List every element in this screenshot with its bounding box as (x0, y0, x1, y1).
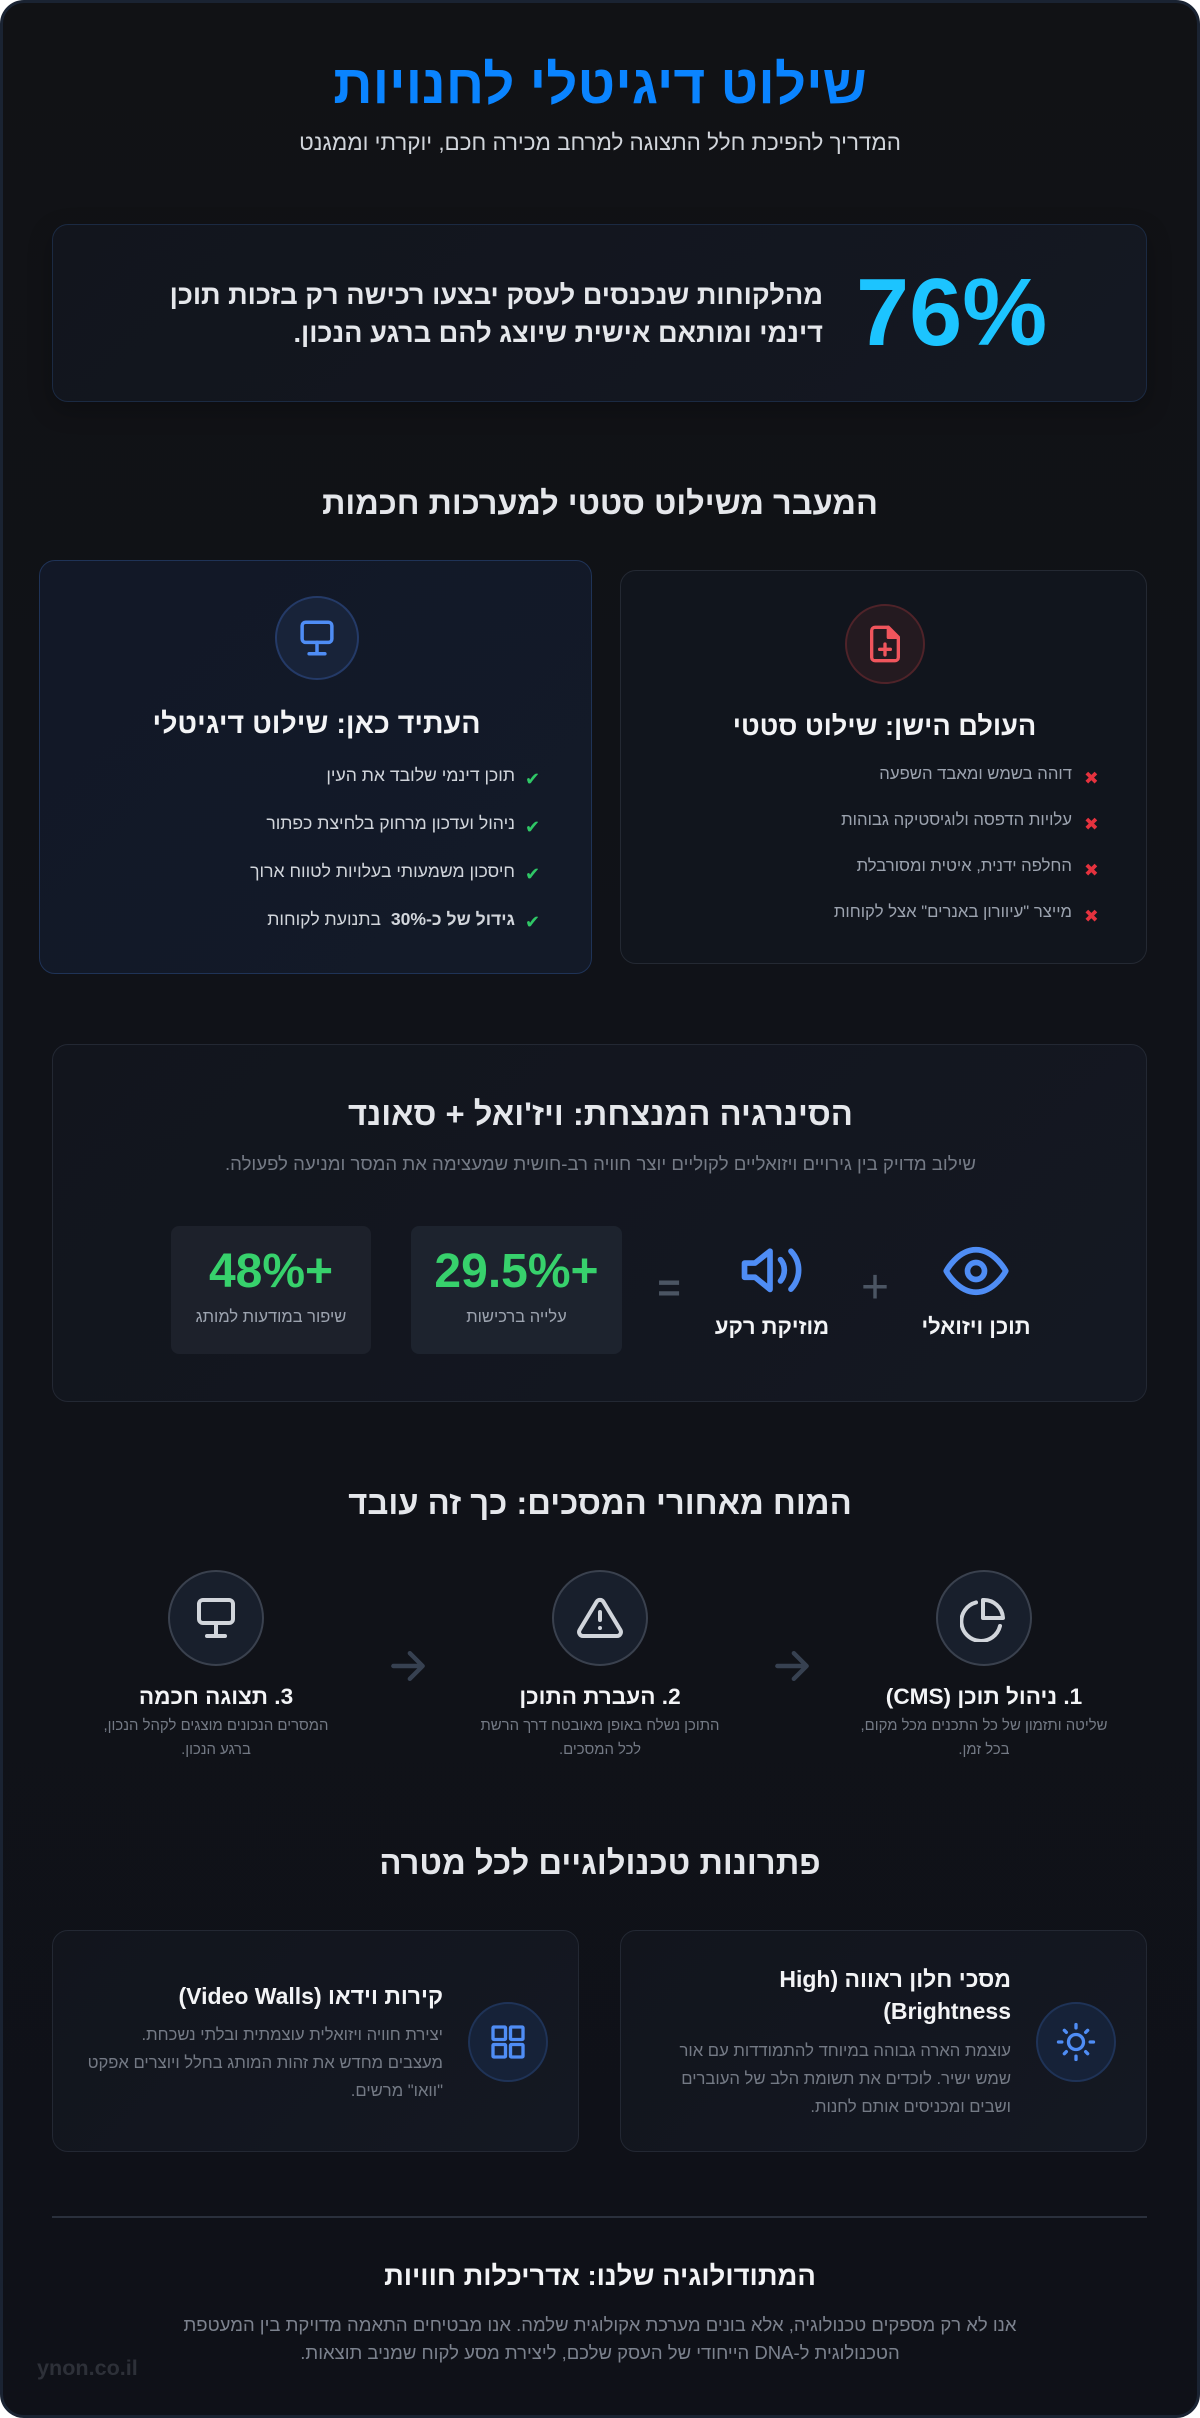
step description: שליטה ותזמון של כל התכנים מכל מקום, (860, 1718, 1108, 1734)
card description: מעצבים מחדש את זהות המותג בחלל ויוצרים אפקט (88, 2053, 443, 2072)
step title: 2. העברת התוכן (519, 1684, 681, 1709)
list: benefits: תוכן דינמי שלובד את העין (326, 765, 515, 785)
stat box: brand awareness: +48% (209, 1245, 333, 1298)
step 2: content delivery (480, 1570, 719, 1758)
arrow: step 1 to 2 (775, 1651, 809, 1681)
heading: methodology: המתודולוגיה שלנו: אדריכלות חוויות (384, 2260, 816, 2291)
icon: monitor (275, 596, 359, 680)
card description: יצירת חוויה ויזואלית עוצמתית ובלתי נשכחת. (142, 2025, 443, 2044)
stat box: brand awareness: שיפור במודעות למותג (196, 1308, 346, 1326)
plus sign: + (861, 1261, 889, 1314)
panel: synergy (52, 1044, 1147, 1402)
list: benefits: ✔ (525, 769, 540, 790)
list: benefits (250, 765, 540, 933)
step description: לכל המסכים. (559, 1742, 641, 1758)
list: drawbacks: ✖ (1084, 769, 1099, 789)
icon: document (845, 604, 925, 684)
icon: pie chart (936, 1570, 1032, 1666)
list: drawbacks: ✖ (1084, 861, 1099, 881)
stat box: sales lift: +29.5% (434, 1245, 599, 1298)
list: drawbacks: מייצר "עיוורון באנרים" אצל לקוחות (834, 902, 1072, 921)
step title: 1. ניהול תוכן (CMS) (886, 1684, 1082, 1709)
list: benefits: גידול של כ-30% בתנועת לקוחות (267, 909, 515, 929)
step 1: content management (860, 1570, 1108, 1758)
panel description: שילוב מדויק בין גירויים ויזואליים לקוליים יוצר חוויה רב-חושית שמעצימה את המסר ומניעה לפעולה. (225, 1153, 976, 1174)
heading: how it works: המוח מאחורי המסכים: כך זה עובד (348, 1484, 852, 1521)
arrow: step 2 to 3 (391, 1651, 425, 1681)
panel heading: הסינרגיה המנצחת: ויז'ואל + סאונד (348, 1095, 853, 1132)
card description: שמש ישיר. לוכדים את תשומת הלב של העוברים (681, 2069, 1011, 2088)
list: benefits: חיסכון משמעותי בעלויות לטווח ארוך (250, 861, 515, 881)
statistic text: דינמי ומותאם אישית שיוצג להם ברגע הנכון. (293, 317, 823, 348)
panel: window displays (620, 1930, 1147, 2152)
statistic text: מהלקוחות שנכנסים לעסק יבצעו רכישה רק בזכות תוכן (170, 279, 823, 310)
card description: עוצמת הארה גבוהה במיוחד להתמודדות עם אור (680, 2041, 1011, 2060)
card title: Brightness) (883, 1998, 1011, 2024)
step description (480, 1718, 719, 1758)
list: benefits: ניהול ועדכון מרחוק בלחיצת כפתור (266, 813, 515, 833)
heading: static to smart: המעבר משילוט סטטי למערכות חכמות (322, 485, 878, 521)
step title: 3. תצוגה חכמה (139, 1684, 293, 1709)
icon: warning triangle (552, 1570, 648, 1666)
step description: ברגע הנכון. (181, 1742, 251, 1758)
list: drawbacks: דוהה בשמש ומאבד השפעה (879, 764, 1072, 783)
step description: המסרים הנכונים מוצגים לקהל הנכון, (104, 1718, 328, 1734)
list: drawbacks: החלפה ידנית, איטית ומסורבלת (857, 856, 1072, 875)
list: drawbacks: ✖ (1084, 907, 1099, 927)
card title (779, 1966, 1011, 2024)
label: visual content: תוכן ויזואלי (921, 1314, 1031, 1339)
methodology text: אנו לא רק מספקים טכנולוגיה, אלא בונים מערכת אקולוגית שלמה. אנו מבטיחים התאמה מדויקת בין המעטפת (184, 2314, 1016, 2335)
panel: video walls (52, 1930, 579, 2152)
label: background music: מוזיקת רקע (715, 1314, 829, 1339)
panel: key statistic (52, 224, 1147, 402)
step description: בכל זמן. (958, 1742, 1010, 1758)
statistic number: 76% (856, 260, 1047, 366)
icon: speaker (742, 1248, 802, 1292)
list: benefits: ✔ (525, 912, 540, 933)
list: benefits: ✔ (525, 864, 540, 885)
card description (680, 2041, 1011, 2116)
methodology text (184, 2314, 1016, 2363)
list: drawbacks (834, 764, 1099, 927)
step description (104, 1718, 328, 1758)
card heading: העולם הישן: שילוט סטטי (733, 710, 1036, 741)
panel: future digital signage (39, 560, 592, 974)
panel: old world static signage (620, 570, 1147, 964)
statistic text (170, 279, 823, 348)
list: benefits: ✔ (525, 817, 540, 838)
list: drawbacks: עלויות הדפסה ולוגיסטיקה גבוהות (841, 810, 1072, 829)
card description: "וואו" מרשים. (351, 2081, 443, 2100)
card description: ושבים ומכניסים אותם לחנות. (810, 2097, 1011, 2116)
stat box: sales lift: עלייה ברכישות (466, 1308, 567, 1326)
icon: monitor (168, 1570, 264, 1666)
card description (88, 2025, 443, 2100)
subtitle: המדריך להפיכת חלל התצוגה למרחב מכירה חכם, יוקרתי וממגנט (299, 130, 901, 155)
equals sign: = (657, 1266, 681, 1310)
icon: eye (943, 1246, 1009, 1296)
methodology text: הטכנולוגית ל-DNA הייחודי של העסק שלכם, ליצירת מסע לקוח שמניב תוצאות. (300, 2342, 900, 2363)
watermark: ynon.co.il (37, 2355, 138, 2380)
icon: grid (468, 2002, 548, 2082)
stat box: brand awareness (171, 1226, 371, 1354)
icon: sun (1036, 2002, 1116, 2082)
card title: קירות וידאו (Video Walls) (178, 1983, 443, 2009)
list: drawbacks: ✖ (1084, 815, 1099, 835)
title: שילוט דיגיטלי לחנויות (333, 53, 867, 115)
step description: התוכן נשלח באופן מאובטח דרך הרשת (481, 1718, 719, 1734)
stat box: sales lift (411, 1226, 622, 1354)
card title: מסכי חלון ראווה (High (779, 1966, 1011, 1992)
card heading: העתיד כאן: שילוט דיגיטלי (152, 708, 481, 740)
step 3: smart display (104, 1570, 328, 1758)
step description (860, 1718, 1108, 1758)
heading: tech solutions: פתרונות טכנולוגיים לכל מטרה (379, 1844, 821, 1881)
